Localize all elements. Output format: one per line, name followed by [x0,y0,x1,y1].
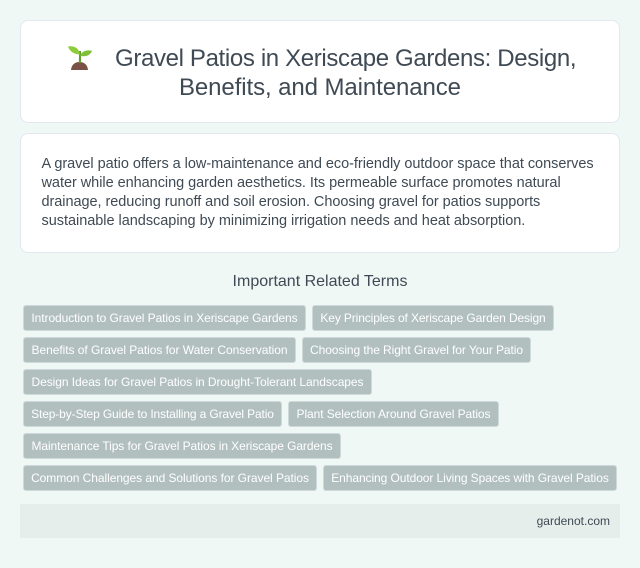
chip: Maintenance Tips for Gravel Patios in Xeriscape Gardens [31,439,333,453]
heading: Benefits, and Maintenance [179,74,461,101]
text block: description: sustainable landscaping by minimizing irrigation needs and heat absorption. [42,213,525,229]
panel: description card [20,133,620,253]
chip: Key Principles of Xeriscape Garden Design [320,311,546,325]
chip [288,401,499,427]
text block: description: water while enhancing garden aesthetics. Its permeable surface promotes natural [42,175,561,191]
heading: Gravel Patios in Xeriscape Gardens: Design, [115,45,576,72]
chip [323,465,617,491]
chip [23,433,341,459]
chip [23,337,296,363]
chip: Benefits of Gravel Patios for Water Conservation [32,343,287,357]
chip [302,337,531,363]
chip: Plant Selection Around Gravel Patios [297,407,490,421]
panel: title card [20,20,620,123]
text block: description [42,156,594,229]
chip: Choosing the Right Gravel for Your Patio [310,343,523,357]
chip [23,305,306,331]
chip: Step-by-Step Guide to Installing a Gravel Patio [31,407,274,421]
chip: Common Challenges and Solutions for Gravel Patios [31,471,309,485]
chip: Enhancing Outdoor Living Spaces with Gravel Patios [331,471,609,485]
heading [115,45,576,101]
panel: term chips [23,305,617,491]
chip: Introduction to Gravel Patios in Xeriscape Gardens [31,311,298,325]
footer text: gardenot.com [537,514,610,528]
footer bar [20,504,620,538]
heading: related terms: Important Related Terms [233,273,407,290]
chip [312,305,554,331]
chip [23,369,372,395]
chip: Design Ideas for Gravel Patios in Drought-Tolerant Landscapes [32,375,363,389]
chip [23,401,282,427]
text block: description: drainage, reducing runoff and soil erosion. Choosing gravel for patios supports [42,194,540,210]
icon: sprout [68,46,92,70]
text block: description: A gravel patio offers a low-maintenance and eco-friendly outdoor space that conserves [42,156,594,172]
chip [23,465,317,491]
